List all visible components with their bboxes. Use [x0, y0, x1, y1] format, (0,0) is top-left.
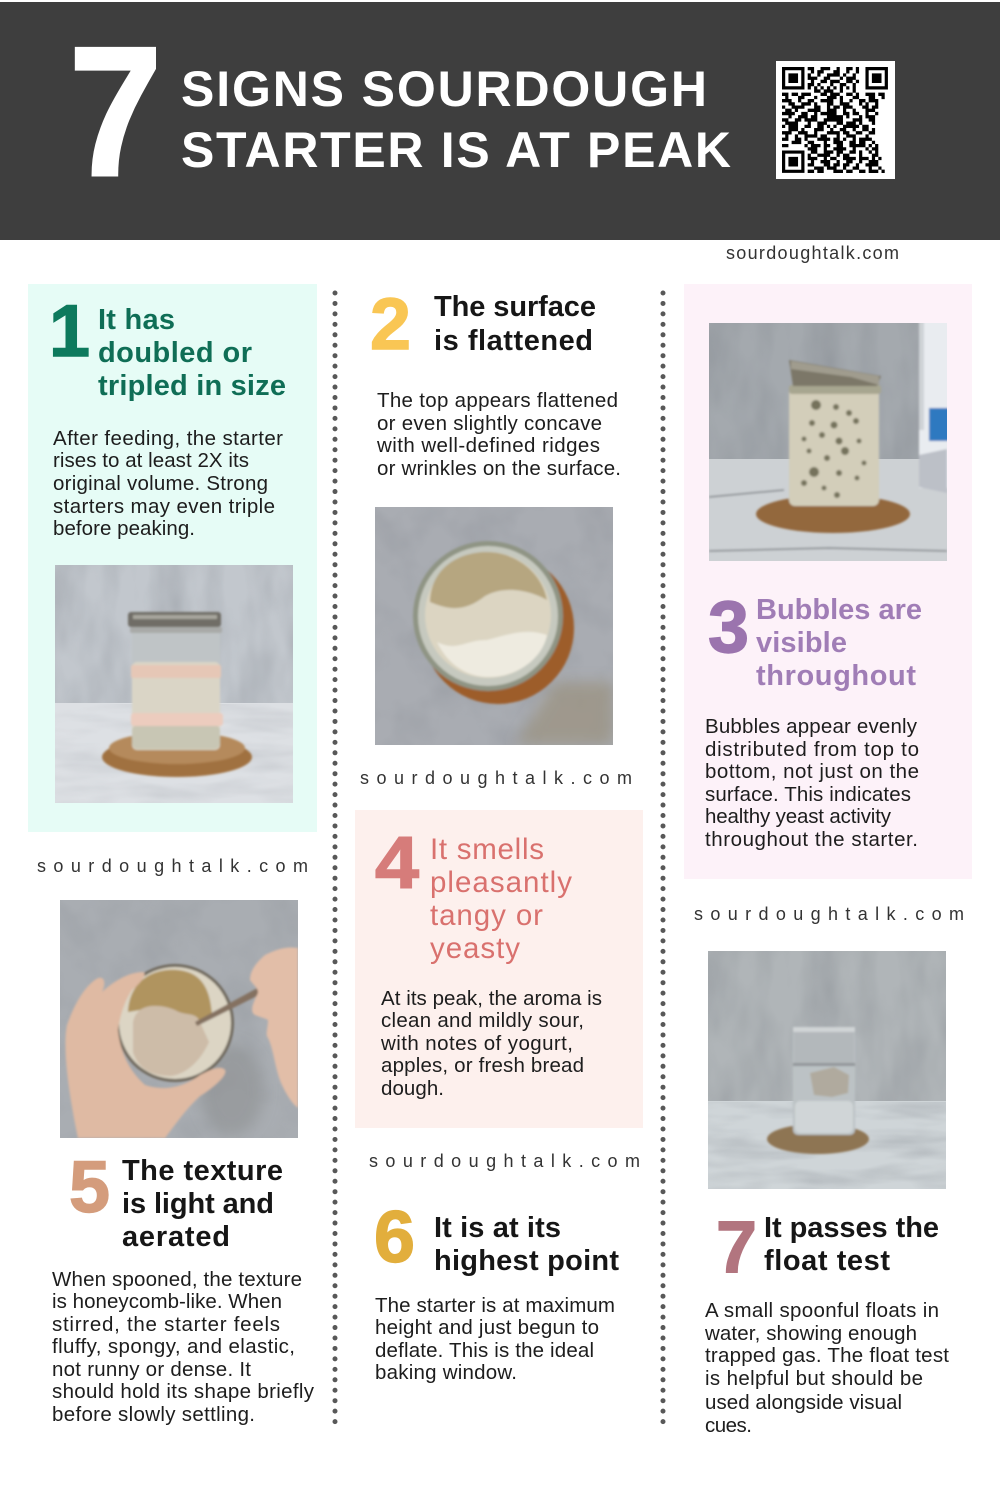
text 5: should hold its shape briefly [52, 1380, 315, 1403]
text 2: with well-defined ridges [376, 434, 600, 457]
text 5: fluffy, spongy, and elastic, [52, 1335, 295, 1358]
heading 6 [434, 1212, 619, 1277]
photo: flattened surface from above [375, 507, 613, 745]
number 6: 6 [374, 1197, 415, 1278]
text 7: water, showing enough [704, 1322, 917, 1345]
text 5 [52, 1268, 315, 1426]
heading 2 [434, 291, 596, 357]
text 4: clean and mildly sour, [381, 1009, 584, 1032]
heading 4: tangy or [430, 899, 543, 932]
text 5: not runny or dense. It [52, 1358, 251, 1381]
text 7: used alongside visual [705, 1391, 902, 1414]
dotted divider left [332, 293, 338, 1424]
number 5: 5 [69, 1147, 110, 1228]
text 6: deflate. This is the ideal [375, 1339, 594, 1362]
photo: bubbles in jar [709, 318, 952, 561]
header banner [0, 2, 1000, 240]
title [181, 61, 731, 178]
heading 5: The texture [122, 1155, 283, 1187]
text 3: Bubbles appear evenly [705, 715, 918, 738]
text 7: is helpful but should be [705, 1367, 923, 1390]
panel: sign 5 [52, 900, 315, 1426]
heading 1: tripled in size [98, 370, 286, 402]
heading 5: aerated [122, 1221, 230, 1253]
title: STARTER IS AT PEAK [181, 122, 731, 178]
heading 7 [764, 1212, 939, 1277]
text 3: distributed from top to [705, 738, 919, 761]
title: SIGNS SOURDOUGH [181, 61, 707, 117]
heading 1: doubled or [98, 337, 252, 369]
text 4: At its peak, the aroma is [381, 987, 602, 1010]
text 1 [53, 427, 283, 540]
heading 3: throughout [756, 660, 916, 692]
site credit: under panel 4: sourdoughtalk.com [369, 1151, 640, 1171]
panel: sign 7 [708, 951, 946, 1189]
text 1: After feeding, the starter [53, 427, 283, 450]
heading 4 [430, 833, 572, 965]
heading 7: float test [764, 1245, 890, 1277]
text 4 [380, 987, 602, 1100]
text 2: or wrinkles on the surface. [377, 457, 621, 480]
heading 1: It has [98, 304, 175, 336]
site credit: under panel 3: sourdoughtalk.com [694, 904, 964, 924]
text 2: The top appears flattened [377, 389, 618, 412]
text 6: baking window. [375, 1361, 517, 1384]
text 3: surface. This indicates [705, 783, 911, 806]
photo: float test in water glass [708, 951, 946, 1189]
number 3: 3 [708, 587, 749, 668]
heading 4: It smells [430, 833, 544, 866]
heading 4: pleasantly [430, 866, 572, 899]
site credit: header: sourdoughtalk.com [726, 243, 899, 263]
panel: sign 1 [28, 284, 317, 832]
heading 5 [122, 1155, 283, 1253]
text 7 [704, 1299, 949, 1437]
dotted divider right [660, 293, 666, 1424]
text 7: A small spoonful floats in [705, 1299, 939, 1322]
text 4: with notes of yogurt, [380, 1032, 573, 1055]
text 2 [376, 389, 621, 480]
big number 7: 7 [69, 8, 162, 214]
heading 4: yeasty [430, 932, 520, 965]
text 1: before peaking. [53, 517, 195, 540]
number 7: 7 [716, 1207, 757, 1288]
heading 2: The surface [434, 291, 596, 323]
text 3: throughout the starter. [705, 828, 918, 851]
heading 3: visible [756, 627, 847, 659]
QR code [776, 61, 895, 179]
text 4: apples, or fresh bread [381, 1054, 584, 1077]
site credit: under text 2: sourdoughtalk.com [360, 768, 632, 788]
text 6: height and just begun to [375, 1316, 599, 1339]
text 1: original volume. Strong [53, 472, 268, 495]
photo: spoon stirring starter [60, 900, 298, 1138]
text 3: bottom, not just on the [705, 760, 919, 783]
text 5: before slowly settling. [52, 1403, 255, 1426]
number 4: 4 [375, 823, 419, 904]
number 1: 1 [49, 291, 90, 372]
heading 7: It passes the [764, 1212, 939, 1244]
text 6: The starter is at maximum [375, 1294, 615, 1317]
text 5: stirred, the starter feels [52, 1313, 280, 1336]
text 1: starters may even triple [53, 495, 275, 518]
text 6 [375, 1294, 615, 1384]
number 2: 2 [370, 284, 411, 365]
panel: sign 3 [684, 284, 972, 879]
panel: sign 2 [360, 284, 632, 788]
text 2: or even slightly concave [377, 412, 602, 435]
heading 3: Bubbles are [756, 594, 922, 626]
heading 2: is flattened [434, 325, 593, 357]
panel: sign 6 [374, 1197, 619, 1384]
heading 1 [98, 304, 286, 402]
text 3: healthy yeast activity [705, 805, 892, 828]
heading 3 [756, 594, 922, 692]
heading 5: is light and [122, 1188, 274, 1220]
text 7: trapped gas. The float test [705, 1344, 949, 1367]
text 3 [705, 715, 919, 851]
text 1: rises to at least 2X its [53, 449, 249, 472]
text 4: dough. [381, 1077, 444, 1100]
heading 6: It is at its [434, 1212, 561, 1244]
site credit: under panel 1: sourdoughtalk.com [37, 856, 308, 876]
text 7: cues. [705, 1414, 752, 1437]
heading 6: highest point [434, 1245, 619, 1277]
text 5: is honeycomb-like. When [52, 1290, 282, 1313]
panel: sign 4 [355, 810, 643, 1128]
photo: jar doubled in size [55, 565, 293, 803]
text 5: When spooned, the texture [52, 1268, 302, 1291]
